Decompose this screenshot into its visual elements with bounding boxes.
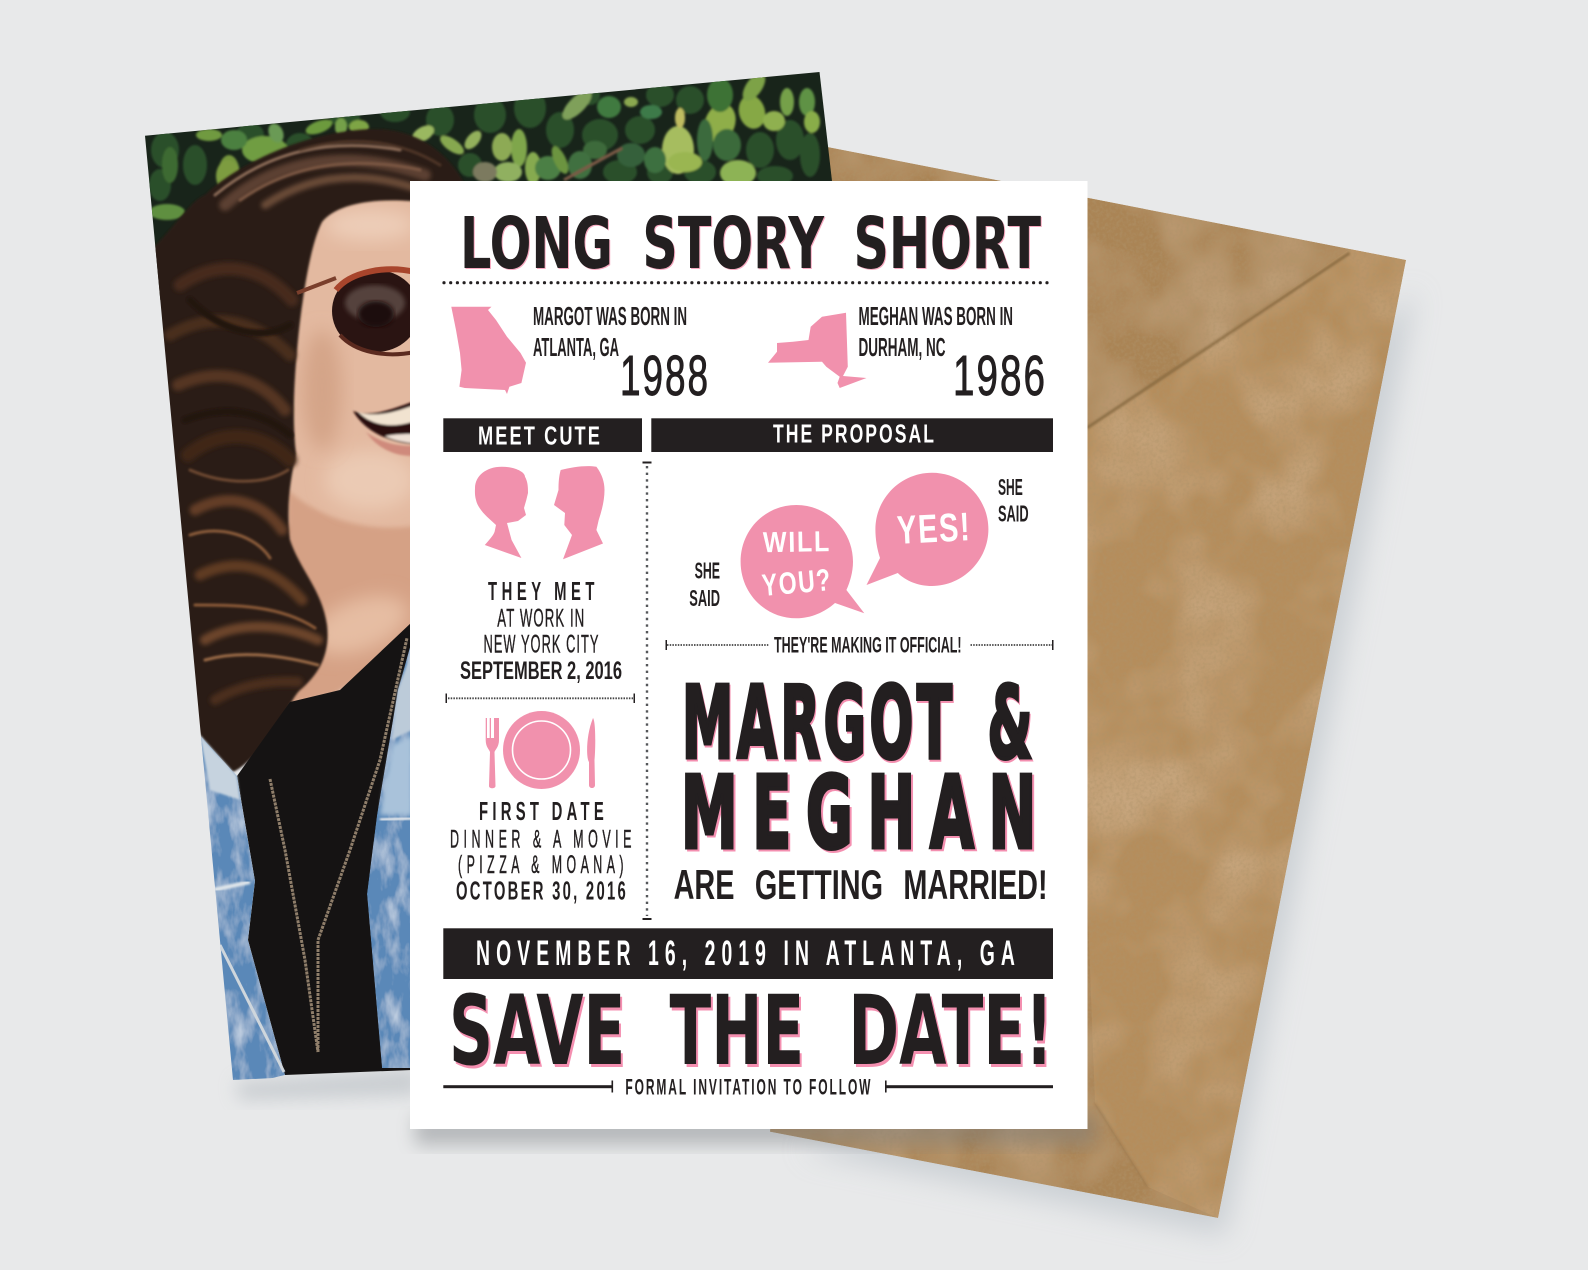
icon: knife	[587, 718, 595, 788]
panel: Margot birthplace: ATLANTA, GA	[533, 332, 619, 362]
hair: fine highlights	[185, 142, 440, 665]
date banner	[443, 928, 1053, 979]
icon: silhouette right	[554, 466, 604, 559]
icon: fork	[486, 718, 499, 788]
label: she said left: SHE	[695, 557, 720, 583]
headline: save the date: SAVE THE DATE!	[449, 975, 1053, 1087]
year 1988: 1988	[620, 344, 710, 408]
photo: skin	[287, 198, 410, 702]
headline: Meghan: MEGHAN	[681, 754, 1051, 872]
panel: the proposal	[666, 473, 1054, 908]
rule	[446, 694, 635, 703]
headline: Margot &: MARGOT &	[682, 664, 1036, 782]
lower crease	[1095, 1103, 1148, 1187]
heading bar: meet cute	[443, 418, 642, 452]
speech bubble: will you: WILL	[763, 526, 831, 559]
photo: hair	[155, 128, 463, 773]
rule: they're making it official: THEY'RE MAKING IT OFFICIAL!	[774, 633, 962, 658]
photo: neck shading	[288, 492, 410, 702]
label: she said right	[998, 474, 1029, 527]
icon: silhouette left	[475, 467, 528, 558]
icon: plate	[503, 711, 580, 789]
dotted divider	[444, 281, 1050, 284]
icon: New York state	[768, 313, 866, 388]
text: dinner and a movie: DINNER & A MOVIE	[450, 825, 636, 853]
speech bubble: will you	[741, 505, 864, 618]
envelope back	[770, 147, 1406, 1218]
vertical dotted divider	[642, 462, 652, 920]
hair: broad shaded locks	[170, 161, 425, 700]
envelope	[770, 147, 1416, 1236]
label: she said right: SHE	[998, 474, 1023, 500]
label: she said right: SAID	[998, 501, 1029, 527]
panel: Margot birthplace	[451, 301, 710, 408]
photo: smile	[353, 402, 412, 456]
text: Margot was born in: MARGOT WAS BORN IN	[533, 301, 687, 331]
label: she said left: SAID	[689, 585, 720, 611]
panel: first date: (PIZZA & MOANA)	[458, 851, 628, 879]
heading bar: the proposal: THE PROPOSAL	[773, 419, 936, 449]
text: they met: THEY MET	[488, 576, 599, 606]
headline: are getting married: ARE GETTING MARRIED!	[674, 861, 1048, 908]
speech bubble: will you: YOU?	[760, 562, 833, 603]
photo: sunglasses	[297, 269, 420, 354]
photo: denim jacket right	[367, 640, 412, 1068]
year 1986: 1986	[953, 344, 1047, 408]
footer rule: formal invitation to follow: FORMAL INVITATION TO FOLLOW	[625, 1074, 872, 1099]
footer rule: formal invitation to follow	[443, 1074, 1053, 1099]
photo shadow	[235, 1068, 420, 1100]
panel: Meghan birthplace	[768, 301, 1047, 408]
photo: necklace	[270, 638, 407, 1052]
photo: black top	[237, 622, 412, 1075]
label: she said left	[689, 557, 720, 611]
photo: foliage backdrop	[130, 60, 840, 300]
speech bubble: yes: YES!	[896, 505, 972, 553]
photo print	[120, 60, 840, 1090]
invitation card	[410, 181, 1088, 1129]
flap crease	[1087, 253, 1350, 428]
panel: meet cute	[446, 466, 635, 703]
heading bar: the proposal	[651, 418, 1053, 452]
text: Meghan was born in: MEGHAN WAS BORN IN	[858, 301, 1013, 331]
text: at work in: AT WORK IN	[497, 605, 585, 633]
panel: first date	[450, 711, 636, 905]
text: first date day: OCTOBER 30, 2016	[456, 875, 628, 905]
foliage: dark mid-layer leaves	[149, 83, 820, 201]
text: Durham: DURHAM, NC	[858, 332, 946, 362]
icon: Georgia state	[451, 307, 526, 394]
heading bar: meet cute: MEET CUTE	[478, 420, 602, 450]
text: meet date: SEPTEMBER 2, 2016	[460, 657, 622, 685]
speech bubble: yes	[866, 473, 988, 586]
title: LONG STORY SHORT	[460, 202, 1041, 285]
card shadow	[415, 1115, 1095, 1145]
text: first date: FIRST DATE	[479, 796, 608, 826]
envelope flap	[1070, 249, 1406, 1218]
date banner: NOVEMBER 16, 2019 IN ATLANTA, GA	[476, 934, 1021, 973]
photo: denim jacket left	[195, 730, 285, 1090]
text: new york city: NEW YORK CITY	[484, 630, 600, 658]
